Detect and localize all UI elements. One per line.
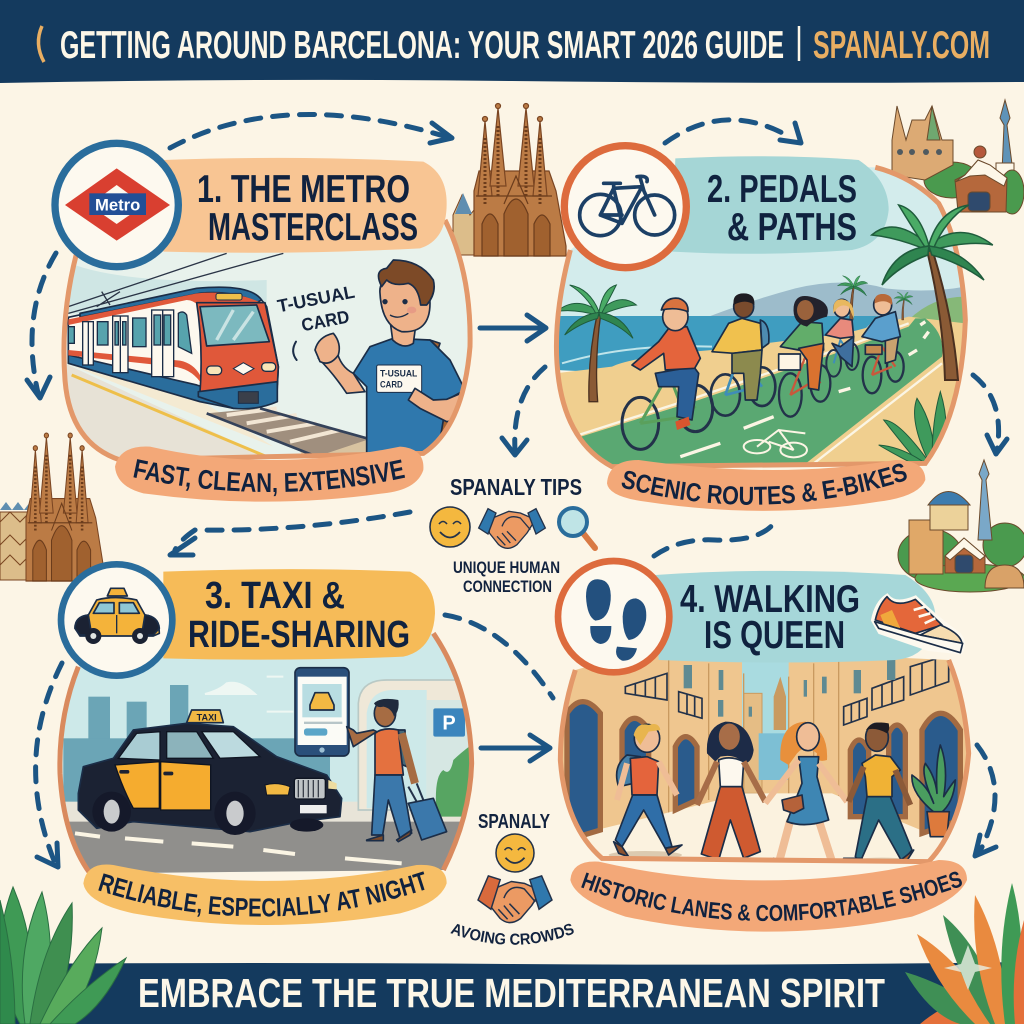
- scene: walls: [562, 655, 966, 830]
- panel: walking: [558, 655, 972, 864]
- heading: 2 pedals pill: [672, 156, 889, 254]
- illustration: palm left: [556, 285, 636, 402]
- icon: Sagrada Familia left: [0, 433, 104, 581]
- arrow: left down: [27, 253, 56, 398]
- scene: pavement strip: [65, 802, 461, 822]
- arrow: tips to panel 3: [170, 512, 410, 555]
- illustration: man: T-USUAL: [380, 369, 418, 379]
- arrow: panel 1 to 2: [480, 315, 546, 341]
- icon: Gaudi landmarks top right: [892, 100, 1024, 214]
- illustration: taxi car: [78, 710, 342, 835]
- illustration: walker 2: [690, 722, 765, 872]
- panel: metro: [61, 218, 473, 462]
- heading: 1 metro pill: 1. THE METRO: [197, 168, 410, 211]
- panel border: [560, 660, 969, 862]
- caption: bikes: SCENIC ROUTES & E-BIKES: [622, 464, 907, 505]
- arrow: left to bottom: [36, 663, 62, 867]
- scene: clouds: [205, 677, 293, 712]
- illustration: cyclist 1: [622, 298, 713, 449]
- scene: rails: [207, 408, 367, 457]
- scene: sky: [66, 224, 468, 454]
- panel: taxi: [50, 633, 483, 887]
- callout: Spanaly avoiding crowds: AVOING CROWDS: [450, 924, 574, 945]
- scene: windows: [684, 660, 895, 717]
- arrow: panel 3 to 4 straight: [481, 735, 550, 761]
- small bracket mark: [293, 342, 297, 360]
- callout: Spanaly tips: SPANALY TIPS: [450, 474, 582, 500]
- arrow: panel 3 to 4 curve: [445, 615, 553, 698]
- scene: sea: [555, 316, 879, 373]
- scene: sky tint: [68, 266, 267, 314]
- arrow: top right arch: [665, 120, 801, 143]
- scene: left arches: [567, 702, 697, 840]
- panel border: [60, 633, 472, 873]
- title banner: [0, 0, 1024, 83]
- label: T-usual card: T-USUAL: [276, 282, 356, 316]
- illustration: train: [68, 287, 278, 409]
- illustration: traveller: [347, 699, 447, 842]
- callout: Spanaly tips: CONNECTION: [463, 577, 552, 596]
- illustration: phone: [295, 668, 349, 756]
- scene: shadows: [609, 851, 919, 877]
- illustration: walker 1: [614, 724, 682, 857]
- heading: 4 walking pill: [655, 571, 935, 662]
- scene: station: [358, 680, 473, 817]
- icon: magnifier: [559, 508, 595, 548]
- icon: handshake: [479, 509, 545, 548]
- heading: 4 walking pill: IS QUEEN: [704, 614, 845, 657]
- label: T-usual card: [276, 282, 361, 339]
- heading: 3 taxi pill: RIDE-SHARING: [188, 614, 410, 656]
- illustration: taxi car: TAXI: [197, 713, 217, 723]
- icon: metro sign: Metro: [95, 195, 140, 214]
- illustration: cyclist 2: [711, 293, 775, 416]
- illustration: bush: [878, 390, 946, 462]
- scene: hills: [710, 282, 962, 328]
- scene: sky: [560, 167, 960, 316]
- scene: ground right: [274, 410, 366, 454]
- arrow: top arch: [170, 114, 452, 148]
- scene: road: [70, 822, 460, 873]
- icon: smile: [430, 507, 470, 547]
- heading: 2 pedals pill: 2. PEDALS: [707, 168, 857, 211]
- scene: building edges: [669, 660, 839, 817]
- caption: taxi: RELIABLE, ESPECIALLY AT NIGHT: [98, 871, 424, 917]
- icon: bicycle: [564, 146, 686, 268]
- heading: 3 taxi pill: 3. TAXI &: [205, 575, 345, 617]
- heading: 2 pedals pill: & PATHS: [727, 206, 857, 249]
- icon: shoe: [874, 597, 963, 653]
- heading: 1 metro pill: [163, 158, 447, 253]
- scene: green cycle path: [582, 318, 942, 464]
- scene: sky: [62, 634, 454, 873]
- callout: Spanaly avoiding crowds: SPANALY: [478, 811, 551, 833]
- icon: Sagrada Familia top centre: [453, 104, 566, 256]
- scene: platform: [66, 364, 257, 457]
- callout: Spanaly tips: [430, 474, 595, 596]
- scene: skyline: [63, 685, 330, 805]
- illustration: plant bottom right: [905, 883, 1024, 1024]
- icon: handshake: [478, 876, 552, 923]
- illustration: cyclist 4: [825, 299, 859, 377]
- illustration: palm tiny: [894, 292, 913, 320]
- illustration: cyclist 3: [779, 296, 830, 417]
- label: T-usual card: CARD: [300, 307, 351, 335]
- arrow: panel 2 to tips: [502, 367, 545, 455]
- illustration: plant: [912, 745, 955, 837]
- bottom banner: [0, 962, 1024, 1024]
- arrow: right down: [973, 375, 1007, 454]
- scene: overhead wires: [68, 253, 283, 313]
- scene: balconies: [625, 655, 949, 725]
- scene: station: P: [442, 712, 456, 734]
- illustration: plant bottom left: [0, 887, 126, 1024]
- caption: metro: FAST, CLEAN, EXTENSIVE: [133, 459, 405, 496]
- icon: taxi: [61, 564, 172, 676]
- panel border: [64, 220, 470, 460]
- illustration: man: CARD: [380, 380, 403, 390]
- caption: walking: HISTORIC LANES & COMFORTABLE SHOES: [581, 872, 962, 922]
- arrow: right panel 4: [975, 745, 996, 856]
- illustration: walker 3: [765, 722, 849, 875]
- heading: 3 taxi pill: [163, 569, 435, 660]
- heading: 1 metro pill: MASTERCLASS: [208, 206, 418, 249]
- scene: sand: [555, 317, 965, 470]
- icon: footprints: [558, 561, 669, 672]
- callout: Spanaly avoiding crowds: [450, 811, 574, 945]
- illustration: walker 4: [844, 722, 914, 865]
- scene: sky gap: [742, 662, 789, 734]
- icon: smile: [496, 834, 534, 872]
- callout: Spanaly tips: UNIQUE HUMAN: [453, 558, 560, 577]
- illustration: man: [315, 260, 465, 460]
- icon: Gaudi landmarks right: [898, 460, 1024, 592]
- heading: 4 walking pill: 4. WALKING: [680, 578, 860, 621]
- illustration: cyclist 5: [862, 294, 904, 393]
- panel: bikes: [545, 160, 979, 473]
- icon: metro sign: [55, 143, 178, 267]
- scene: pavement: [586, 793, 944, 860]
- scene: right arches: [850, 713, 960, 833]
- panel border: [556, 167, 965, 467]
- arrow: dash to panel 4: [654, 522, 775, 556]
- illustration: palm far: [837, 276, 868, 320]
- scene: road markings: [680, 322, 929, 457]
- illustration: palm right overlapping border: [869, 205, 1007, 380]
